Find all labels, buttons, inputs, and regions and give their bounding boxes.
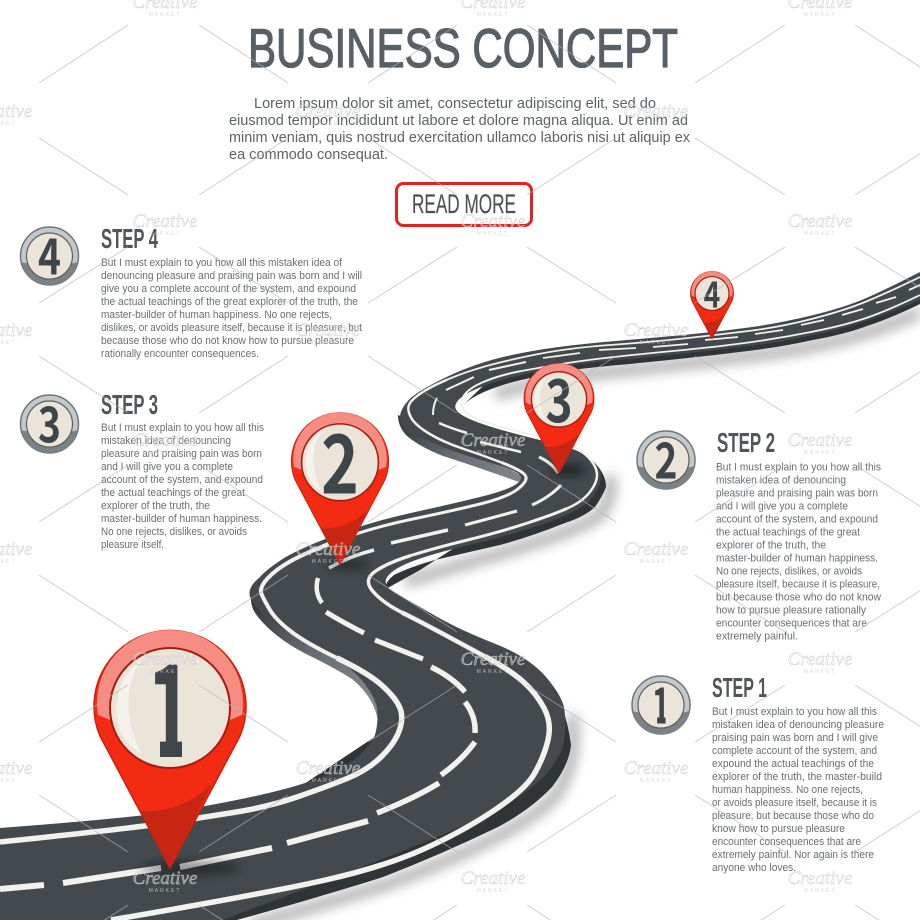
watermark logos: MARKET (149, 12, 181, 18)
watermark logos: MARKET (149, 888, 181, 894)
watermark logos: Creative (296, 539, 360, 560)
watermark logos: MARKET (312, 121, 344, 127)
watermark logos: MARKET (640, 340, 672, 346)
road (0, 272, 920, 920)
watermark logos: MARKET (477, 231, 509, 237)
step 3 badge (20, 385, 78, 457)
road side wall: inner bend upper (398, 415, 525, 483)
step 4 text (101, 257, 362, 360)
title: BUSINESS CONCEPT (248, 17, 678, 79)
watermark logos: MARKET (477, 669, 509, 675)
watermark logos: Creative (133, 649, 197, 670)
watermark logos: MARKET (312, 778, 344, 784)
pin 1 (94, 608, 246, 868)
pin shadows on road (140, 465, 586, 874)
asphalt surface (0, 272, 920, 920)
step 2 text: master-builder of human happiness. (716, 552, 878, 564)
step 4 badge: 4 (38, 217, 61, 289)
step 3 badge: 3 (38, 385, 61, 457)
road side wall: middle (384, 462, 606, 590)
step 1 text: complete account of the system, and (712, 745, 877, 757)
step 1 text: human happiness. No one rejects, (712, 784, 863, 796)
intro paragraph: eiusmod tempor incididunt ut labore et dolore magna aliqua. Ut enim ad (229, 113, 688, 129)
step 2 text (716, 462, 881, 642)
watermark logos: MARKET (477, 888, 509, 894)
road side wall: inner bend lower (251, 590, 380, 722)
white edge line: side A (0, 277, 920, 842)
pin 3 (524, 355, 594, 473)
watermark logos: MARKET (477, 12, 509, 18)
read more button: READ MORE (412, 189, 516, 219)
step 4 text: because those who do not know how to pursue pleasure (101, 335, 354, 347)
pin 2 (291, 400, 389, 565)
step 4 badge (20, 217, 78, 289)
pin 2: 2 (321, 400, 359, 518)
intro paragraph: Lorem ipsum dolor sit amet, consectetur adipiscing elit, sed do (254, 96, 656, 112)
watermark logos: Creative (133, 211, 197, 232)
step 3 text (101, 422, 264, 551)
step 4 text: denouncing pleasure and praising pain was born and I will (101, 270, 362, 282)
watermark logos: Creative (788, 430, 852, 451)
step 4 text: dislikes, or avoids pleasure itself, because it is pleasure, but (101, 322, 362, 334)
white edge line: side B (111, 295, 920, 920)
pin 1: 1 (147, 608, 193, 794)
step 2 text: mistaken idea of denouncing (716, 474, 846, 486)
step 4 text: the actual teachings of the great explorer of the truth, the (101, 296, 358, 308)
road shadow (250, 312, 920, 920)
watermark logos: Creative (624, 758, 688, 779)
step 2 text: but because those who do not know (716, 592, 881, 604)
step 2 text: encounter consequences that are (716, 618, 867, 630)
step 2 badge: 2 (654, 421, 678, 493)
watermark logos: Creative (461, 868, 525, 889)
step 3 text: pleasure and praising pain was born (101, 448, 262, 460)
step 4 text: But I must explain to you how all this mistaken idea of (101, 257, 342, 269)
step 2 text: explorer of the truth, the (716, 540, 826, 552)
watermark logos: Creative (461, 649, 525, 670)
watermark logos: Creative (788, 211, 852, 232)
step 3 text: master-builder of human happiness. (101, 513, 262, 525)
step 4 text: give you a complete account of the system, and expound (101, 283, 356, 295)
step 2 text: how to pursue pleasure rationally (716, 604, 867, 616)
watermark logos: MARKET (149, 450, 181, 456)
step 1 text: extremely painful. Nor again is there (712, 849, 874, 861)
step 1 text: know how to pursue pleasure (712, 823, 845, 835)
step 2 text: But I must explain to you how all this (716, 462, 881, 474)
intro paragraph (229, 96, 691, 163)
step 1 heading: STEP 1 (712, 672, 767, 703)
watermark logos: Creative (296, 758, 360, 779)
watermark logos: MARKET (804, 888, 836, 894)
watermark logos: Creative (133, 868, 197, 889)
step 1 badge: 1 (652, 666, 670, 738)
step 2 text: pleasure and praising pain was born (716, 488, 878, 500)
step 2 text: and I will give you a complete (716, 500, 848, 512)
step 2 text: pleasure itself, because it is pleasure, (716, 578, 880, 590)
watermark logos: Creative (296, 101, 360, 122)
watermark logos: MARKET (312, 340, 344, 346)
step 2 text: the actual teachings of the great (716, 526, 860, 538)
step 3 text: No one rejects, dislikes, or avoids (101, 526, 247, 538)
pin 4: 4 (704, 266, 720, 319)
step 1 badge (631, 675, 691, 735)
intro paragraph: minim veniam, quis nostrud exercitation ullamco laboris nisi ut aliquip ex (229, 130, 691, 146)
step 3 heading: STEP 3 (101, 389, 158, 420)
watermark logos: MARKET (149, 669, 181, 675)
step 1 text: pleasure, but because those who do (712, 810, 874, 822)
watermark logos: MARKET (312, 559, 344, 565)
watermark logos: MARKET (149, 231, 181, 237)
step 3 text: and I will give you a complete (101, 461, 233, 473)
watermark logos: Creative (624, 320, 688, 341)
step 2 heading: STEP 2 (717, 427, 775, 458)
step 2 text: No one rejects, dislikes, or avoids (716, 566, 862, 578)
road side wall: far (462, 298, 920, 406)
watermark logos: Creative (133, 430, 197, 451)
watermark logos: Creative (461, 211, 525, 232)
step 4 text: master-builder of human happiness. No one rejects, (101, 309, 332, 321)
step 2 badge (637, 421, 695, 493)
step 3 text: But I must explain to you how all this (101, 422, 264, 434)
step 1 text: expound the actual teachings of the (712, 758, 874, 770)
watermark logos: MARKET (804, 231, 836, 237)
step 2 text: extremely painful. (716, 630, 798, 642)
watermark logos: Creative (461, 430, 525, 451)
centre dashed line (0, 285, 920, 889)
step 4 heading: STEP 4 (101, 223, 158, 254)
pin 3: 3 (545, 355, 573, 440)
watermark logos: MARKET (477, 450, 509, 456)
step 1 text (712, 706, 884, 874)
watermark logos: MARKET (640, 778, 672, 784)
intro paragraph: ea commodo consequat. (229, 147, 388, 163)
watermark logos: Creative (788, 868, 852, 889)
step 1 text: anyone who loves. (712, 862, 796, 874)
step 3 text: the actual teachings of the great (101, 487, 245, 499)
watermark logos: MARKET (804, 12, 836, 18)
watermark logos: Creative (788, 649, 852, 670)
watermark logos: Creative (624, 539, 688, 560)
watermark logos: Creative (296, 320, 360, 341)
step 1 text: mistaken idea of denouncing pleasure (712, 719, 884, 731)
watermark logos: MARKET (804, 450, 836, 456)
step 3 text: pleasure itself. (101, 539, 164, 551)
watermark logos: Creative (624, 101, 688, 122)
step 3 text: explorer of the truth, the (101, 500, 210, 512)
watermark logos: MARKET (640, 559, 672, 565)
step 1 text: But I must explain to you how all this (712, 706, 877, 718)
watermark logos: MARKET (640, 121, 672, 127)
step 3 text: account of the system, and expound (101, 474, 263, 486)
step 1 text: encounter consequences that are (712, 836, 861, 848)
step 1 text: praising pain was born and I will give (712, 732, 878, 744)
step 2 text: account of the system, and expound (716, 514, 878, 526)
step 4 text: rationally encounter consequences. (101, 348, 259, 360)
watermark logos: MARKET (804, 669, 836, 675)
step 1 text: explorer of the truth, the master-build (712, 771, 882, 783)
road side wall: front (100, 677, 571, 920)
step 1 text: or avoids pleasure itself, because it is (712, 797, 877, 809)
pin 4 (690, 266, 734, 339)
read more button (396, 184, 532, 226)
step 3 text: mistaken idea of denouncing (101, 435, 231, 447)
